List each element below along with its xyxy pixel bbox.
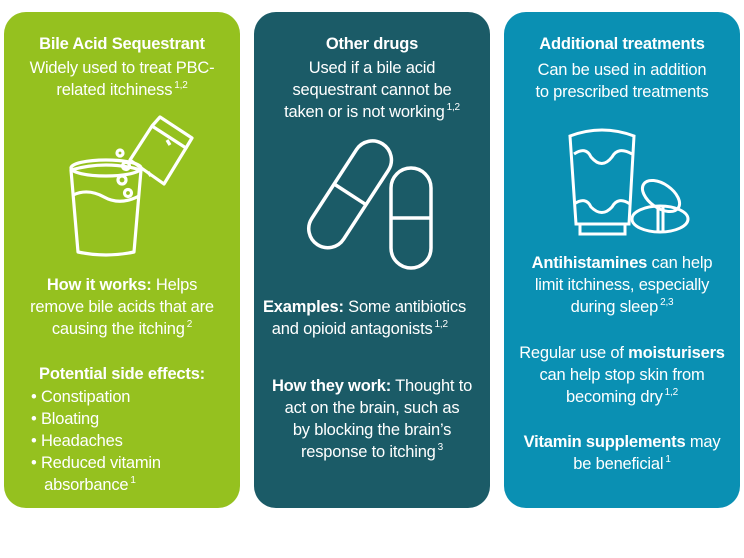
- text: moisturisers: becoming dry1,2: [566, 387, 678, 406]
- text: antihistamines: limit itchiness, especially: [535, 276, 709, 294]
- text: how they work: How they work: Thought to: [272, 377, 472, 395]
- text: how it works: How it works: Helps: [47, 276, 197, 294]
- text: vitamin supplements: be beneficial1: [573, 454, 671, 473]
- text: how it works: [30, 276, 214, 338]
- text: can be used: Can be used in addition: [538, 61, 706, 79]
- text: widely used: Widely used to treat PBC-: [30, 59, 214, 77]
- heading: potential side effects: Potential side effects:: [39, 365, 205, 383]
- text: moisturisers: can help stop skin from: [539, 366, 705, 384]
- heading: additional treatments: Additional treatments: [539, 35, 705, 53]
- text: widely used: [30, 59, 214, 99]
- heading: other drugs: Other drugs: [326, 35, 418, 53]
- list: side effects: [31, 388, 161, 494]
- text: antihistamines: during sleep2,3: [571, 297, 673, 316]
- text: how they work: [272, 377, 472, 461]
- text: vitamin supplements: Vitamin supplements may: [524, 433, 720, 451]
- text: used if: [284, 59, 460, 121]
- text: used if: taken or is not working1,2: [284, 102, 460, 121]
- text: can be used: to prescribed treatments: [535, 83, 709, 101]
- text: how they work: response to itching3: [301, 442, 443, 461]
- list: side effects: • Headaches: [31, 432, 123, 450]
- text: moisturisers: [519, 344, 725, 406]
- text: used if: Used if a bile acid: [309, 59, 435, 77]
- list: side effects: • Bloating: [31, 410, 99, 428]
- list: side effects: • Reduced vitamin: [31, 454, 161, 472]
- text: antihistamines: Antihistamines can help: [532, 254, 712, 272]
- list: side effects: • Constipation: [31, 388, 130, 406]
- text: how it works: causing the itching2: [52, 319, 192, 338]
- text: vitamin supplements: [524, 433, 721, 473]
- icon: cream tube and tablet: [568, 128, 690, 236]
- panel: other drugs: [254, 12, 490, 508]
- text: how they work: act on the brain, such as: [285, 399, 459, 417]
- text: can be used: [535, 61, 709, 101]
- text: how it works: remove bile acids that are: [30, 298, 214, 316]
- text: examples: and opioid antagonists1,2: [272, 319, 448, 338]
- panel: bile acid sequestrant: [4, 12, 240, 508]
- text: how they work: by blocking the brain’s: [293, 421, 451, 439]
- icon: glass with sachet: [69, 115, 194, 257]
- list: side effects: absorbance1: [44, 475, 136, 494]
- text: used if: sequestrant cannot be: [292, 81, 452, 99]
- panel: additional treatments: [504, 12, 740, 508]
- text: widely used: related itchiness1,2: [56, 80, 188, 99]
- text: moisturisers: Regular use of moisturisers: [519, 344, 725, 362]
- text: examples: [263, 298, 466, 338]
- text: examples: Examples: Some antibiotics: [263, 298, 466, 316]
- icon: capsules: [307, 139, 433, 270]
- heading: bile acid: Bile Acid Sequestrant: [39, 35, 205, 53]
- text: antihistamines: [532, 254, 712, 316]
